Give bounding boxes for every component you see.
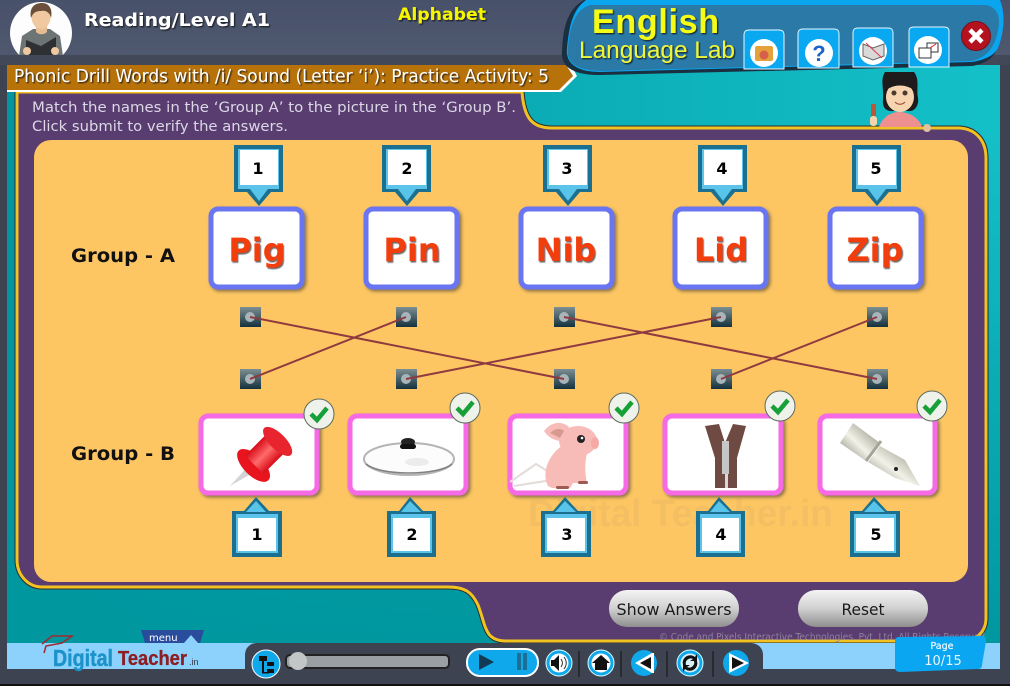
icon: next <box>723 650 749 676</box>
picture card: nib <box>820 416 935 493</box>
title bar: Phonic Drill Words with /i/ Sound (Letter ‘i’): Practice Activity: 5 <box>14 66 549 87</box>
icon: close <box>962 22 990 50</box>
word card: Pig <box>211 209 302 287</box>
callout 5: 5 <box>870 159 882 178</box>
menu tab: menu <box>149 633 178 644</box>
check marks <box>304 391 947 429</box>
callout B3 <box>541 497 591 557</box>
word card: Pin: Pin <box>383 231 441 269</box>
callout 3: 3 <box>561 159 573 178</box>
callout B2: 2 <box>406 525 418 544</box>
icon: book <box>853 28 893 67</box>
callout 4: 4 <box>716 159 728 178</box>
callout B5 <box>850 497 900 557</box>
bottom callouts <box>232 497 900 557</box>
logo: Digital Teacher: Digital <box>53 645 113 671</box>
header bar <box>0 0 1010 55</box>
icon: help <box>798 29 839 68</box>
callout 3 <box>543 145 592 206</box>
check 2 <box>450 393 480 423</box>
callout B2 <box>387 497 436 557</box>
title: English: English <box>592 3 719 41</box>
callout 1 <box>234 145 283 206</box>
progress slider <box>286 652 449 670</box>
play pause pill <box>467 649 538 676</box>
connector terminals <box>240 307 888 389</box>
word card: Nib: Nib <box>536 231 596 269</box>
icon: window <box>909 27 949 67</box>
instructions text: Match the names in the ‘Group A’ to the picture in the ‘Group B’. <box>32 100 516 116</box>
logo: Digital Teacher <box>42 636 199 671</box>
icon: home <box>588 650 614 676</box>
callout 2: 2 <box>401 159 413 178</box>
callout B5: 5 <box>870 525 882 544</box>
icon: refresh <box>677 650 703 676</box>
icon: folder clock <box>744 30 784 69</box>
icon: tree menu <box>252 650 280 678</box>
word card: Pin <box>366 209 457 287</box>
button: Show Answers: Show Answers <box>616 600 732 619</box>
heading: Group B: Group - B <box>71 443 175 465</box>
callout B1: 1 <box>251 525 263 544</box>
watermark: Digital Teacher.in <box>528 493 833 535</box>
button: Reset <box>798 590 928 627</box>
word card: Pig: Pig <box>228 231 286 269</box>
icon: sound <box>546 650 572 676</box>
callout 1: 1 <box>252 159 264 178</box>
word card: Zip <box>830 209 921 287</box>
menu tab <box>141 630 204 644</box>
icon: help: ? <box>812 41 826 66</box>
page indicator: Page <box>930 641 954 652</box>
page indicator: 10/15 <box>924 654 962 669</box>
callout B3: 3 <box>561 525 573 544</box>
icon: back <box>631 650 657 676</box>
control bar <box>245 643 763 684</box>
callout B4: 4 <box>715 525 727 544</box>
callout 2 <box>382 145 431 206</box>
picture card: pig <box>510 416 626 493</box>
avatar: reader <box>10 2 72 55</box>
word card: Lid: Lid <box>694 231 748 269</box>
panel: purple instruction panel <box>17 92 986 641</box>
button: Show Answers <box>609 590 739 627</box>
word card: Zip: Zip <box>846 231 904 269</box>
group B picture cards <box>201 416 935 493</box>
check 5 <box>917 391 947 421</box>
heading: Group A: Group - A <box>71 245 175 267</box>
instructions text: Click submit to verify the answers. <box>32 119 288 135</box>
logo: Digital Teacher: Teacher <box>118 648 187 670</box>
matching lines <box>250 317 877 379</box>
word card: Nib <box>521 209 612 287</box>
check 3 <box>609 393 639 423</box>
panel: activity area <box>34 140 968 582</box>
instructions text <box>32 100 516 135</box>
page indicator <box>895 636 986 672</box>
character: girl <box>870 72 931 132</box>
subtitle: Language Lab: Language Lab <box>579 37 735 64</box>
button: Reset: Reset <box>842 600 884 619</box>
callout 5 <box>852 145 901 206</box>
callout 4 <box>698 145 747 206</box>
dividers <box>579 651 713 677</box>
callout B4 <box>696 497 745 557</box>
panel: English Language Lab <box>562 0 1004 75</box>
check 4 <box>765 391 795 421</box>
copyright: © Code and Pixels Interactive Technologies. Pvt. Ltd. All Rights Reserved <box>659 632 985 643</box>
heading: Alphabet: Alphabet <box>398 5 486 25</box>
top callouts <box>234 145 901 206</box>
check 1 <box>304 399 334 429</box>
picture card: pin <box>201 416 317 493</box>
footer bar <box>0 643 1010 686</box>
logo: Digital Teacher: .in <box>189 657 199 667</box>
picture card: zip <box>665 416 781 493</box>
group A word cards <box>211 209 921 287</box>
callout B1 <box>232 497 282 557</box>
word card: Lid <box>675 209 766 287</box>
picture card: lid <box>350 416 466 493</box>
heading: Reading/Level A1: Reading/Level A1 <box>84 10 270 31</box>
